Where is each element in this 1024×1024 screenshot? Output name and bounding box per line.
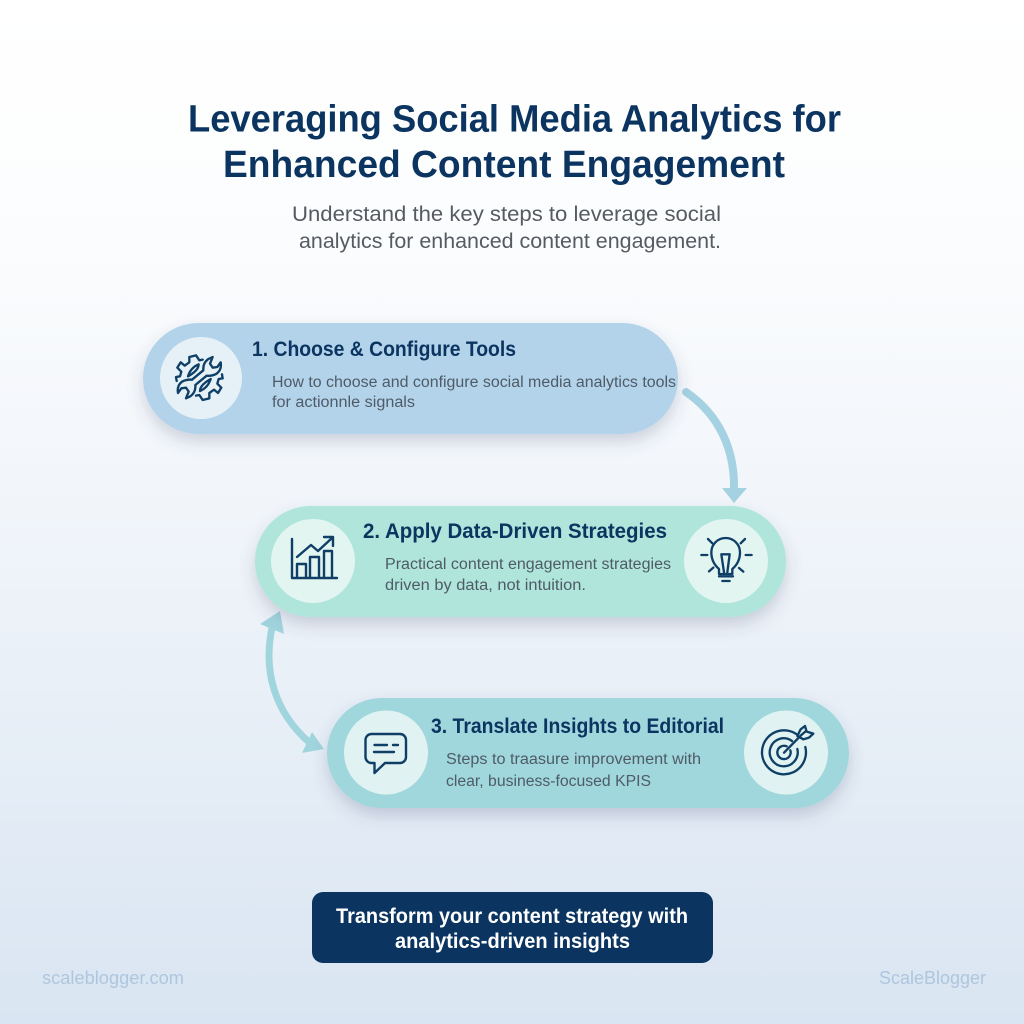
subtitle: Understand the key steps to leverage social bbox=[292, 203, 721, 226]
icon: gear and wrench bbox=[160, 337, 242, 419]
footer: brand: ScaleBlogger bbox=[879, 968, 986, 988]
icon: speech bubble bbox=[344, 710, 428, 794]
subtitle: analytics for enhanced content engagement. bbox=[299, 230, 721, 253]
description bbox=[385, 556, 671, 594]
callout bbox=[312, 892, 713, 963]
icon: target with arrow bbox=[744, 710, 828, 794]
description: Steps to traasure improvement with bbox=[446, 751, 701, 768]
description: Practical content engagement strategies bbox=[385, 556, 671, 573]
callout: Transform your content strategy with bbox=[336, 905, 688, 928]
heading: 1. Choose & Configure Tools bbox=[252, 338, 516, 361]
description bbox=[272, 374, 676, 411]
description: How to choose and configure social media analytics tools bbox=[272, 374, 676, 391]
heading: 3. Translate Insights to Editorial bbox=[431, 715, 724, 738]
title: Leveraging Social Media Analytics for bbox=[188, 98, 841, 140]
icon: bar chart bbox=[271, 519, 355, 603]
description: for actionnle signals bbox=[272, 394, 415, 411]
panel: step 3 bbox=[327, 698, 849, 808]
icon: light bulb bbox=[684, 519, 768, 603]
description bbox=[446, 751, 701, 790]
description: clear, business-focused KPIS bbox=[446, 773, 651, 790]
panel: step 1 bbox=[143, 323, 678, 434]
panel: step 2 bbox=[255, 506, 786, 617]
footer: website: scaleblogger.com bbox=[42, 968, 184, 988]
arrow: step 1 to step 2 bbox=[686, 392, 747, 503]
subtitle bbox=[292, 203, 721, 253]
title: Enhanced Content Engagement bbox=[223, 144, 785, 186]
title bbox=[188, 98, 841, 186]
arrow: between step 2 and step 3 bbox=[260, 611, 324, 753]
callout: analytics-driven insights bbox=[395, 930, 630, 953]
description: driven by data, not intuition. bbox=[385, 577, 586, 594]
heading: 2. Apply Data-Driven Strategies bbox=[363, 520, 667, 543]
